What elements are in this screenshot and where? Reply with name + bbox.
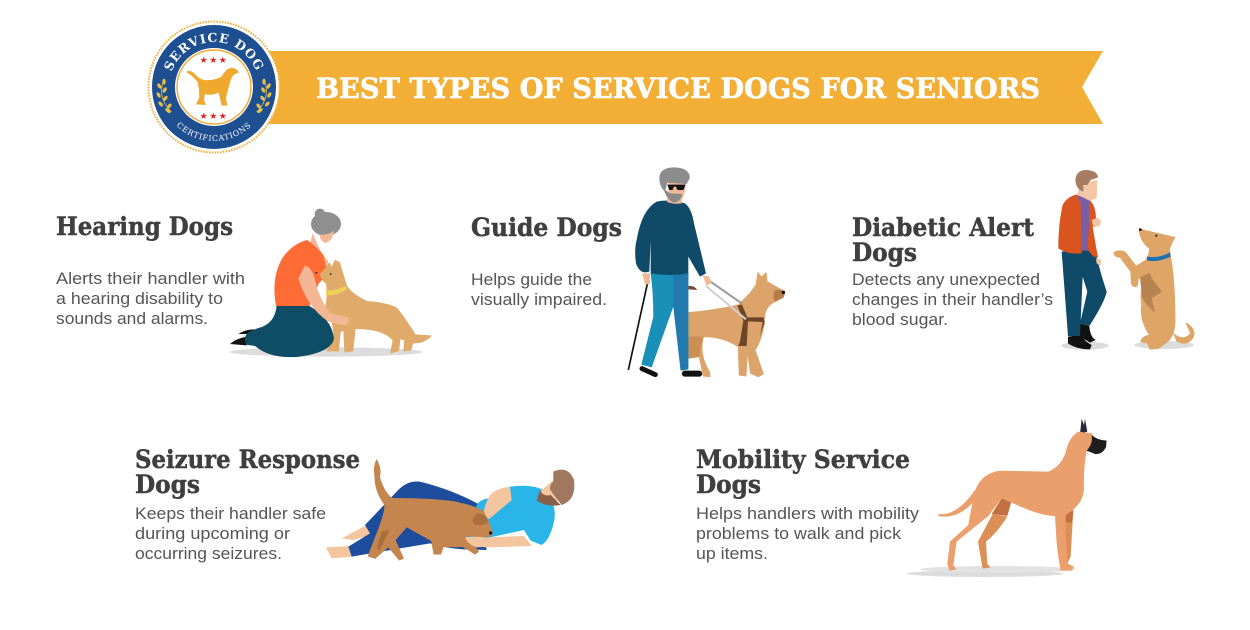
dog body <box>947 432 1097 571</box>
badge stars: ★★★ <box>200 56 228 66</box>
panel: seizure response dogs <box>135 445 574 563</box>
heading: mobility service dogs: Dogs <box>696 470 761 499</box>
logo badge <box>148 20 280 154</box>
illustration: man with alert dog <box>1058 170 1194 350</box>
heading: diabetic alert dogs: Diabetic Alert <box>852 213 1034 242</box>
badge top text: SERVICE DOG <box>164 32 264 71</box>
panel: mobility service dogs <box>696 419 1107 577</box>
text block: hearing dogs <box>56 269 245 328</box>
badge dog icon <box>186 68 239 106</box>
text block: mobility service dogs: problems to walk and pick <box>696 524 902 543</box>
illustration: man lying with dog <box>326 460 574 560</box>
logo badge: ★★★ <box>200 112 228 122</box>
title: BEST TYPES OF SERVICE DOGS FOR SENIORS <box>316 72 1040 105</box>
text block: diabetic alert dogs: changes in their handler’s <box>852 290 1053 309</box>
text block: mobility service dogs: up items. <box>696 544 768 563</box>
text block: seizure response dogs: during upcoming or <box>135 524 290 543</box>
panel: diabetic alert dogs <box>852 170 1194 350</box>
heading: seizure response dogs <box>135 445 360 499</box>
title banner <box>262 51 1103 124</box>
text block: hearing dogs: a hearing disability to <box>56 289 223 308</box>
heading: mobility service dogs <box>696 445 910 499</box>
badge bottom text: CERTIFICATIONS <box>178 122 250 141</box>
text block: guide dogs: visually impaired. <box>471 290 607 309</box>
text block: seizure response dogs: occurring seizures. <box>135 544 282 563</box>
heading: seizure response dogs: Dogs <box>135 470 200 499</box>
text block: diabetic alert dogs: Detects any unexpected <box>852 270 1040 289</box>
badge laurels <box>156 79 272 114</box>
text block: seizure response dogs <box>135 504 326 563</box>
text block: guide dogs: Helps guide the <box>471 270 592 289</box>
heading: hearing dogs: Hearing Dogs <box>56 212 233 241</box>
illustration: great dane <box>907 419 1107 577</box>
text block: seizure response dogs: Keeps their handler safe <box>135 504 326 523</box>
text block: mobility service dogs: Helps handlers with mobility <box>696 504 920 523</box>
tail <box>938 490 977 517</box>
heading: mobility service dogs: Mobility Service <box>696 445 910 474</box>
text block: mobility service dogs <box>696 504 920 563</box>
text block: diabetic alert dogs <box>852 270 1053 329</box>
heading: guide dogs: Guide Dogs <box>471 213 622 242</box>
heading: diabetic alert dogs <box>852 213 1034 267</box>
illustration: blind man with guide dog <box>628 167 785 377</box>
text block: diabetic alert dogs: blood sugar. <box>852 310 948 329</box>
panel: guide dogs <box>471 167 785 377</box>
illustration: woman kneeling with dog <box>229 209 431 357</box>
text block: guide dogs <box>471 270 607 309</box>
text block: hearing dogs: Alerts their handler with <box>56 269 245 288</box>
text block: hearing dogs: sounds and alarms. <box>56 309 208 328</box>
heading: diabetic alert dogs: Dogs <box>852 238 917 267</box>
heading: seizure response dogs: Seizure Response <box>135 445 360 474</box>
panel: hearing dogs <box>56 209 431 357</box>
